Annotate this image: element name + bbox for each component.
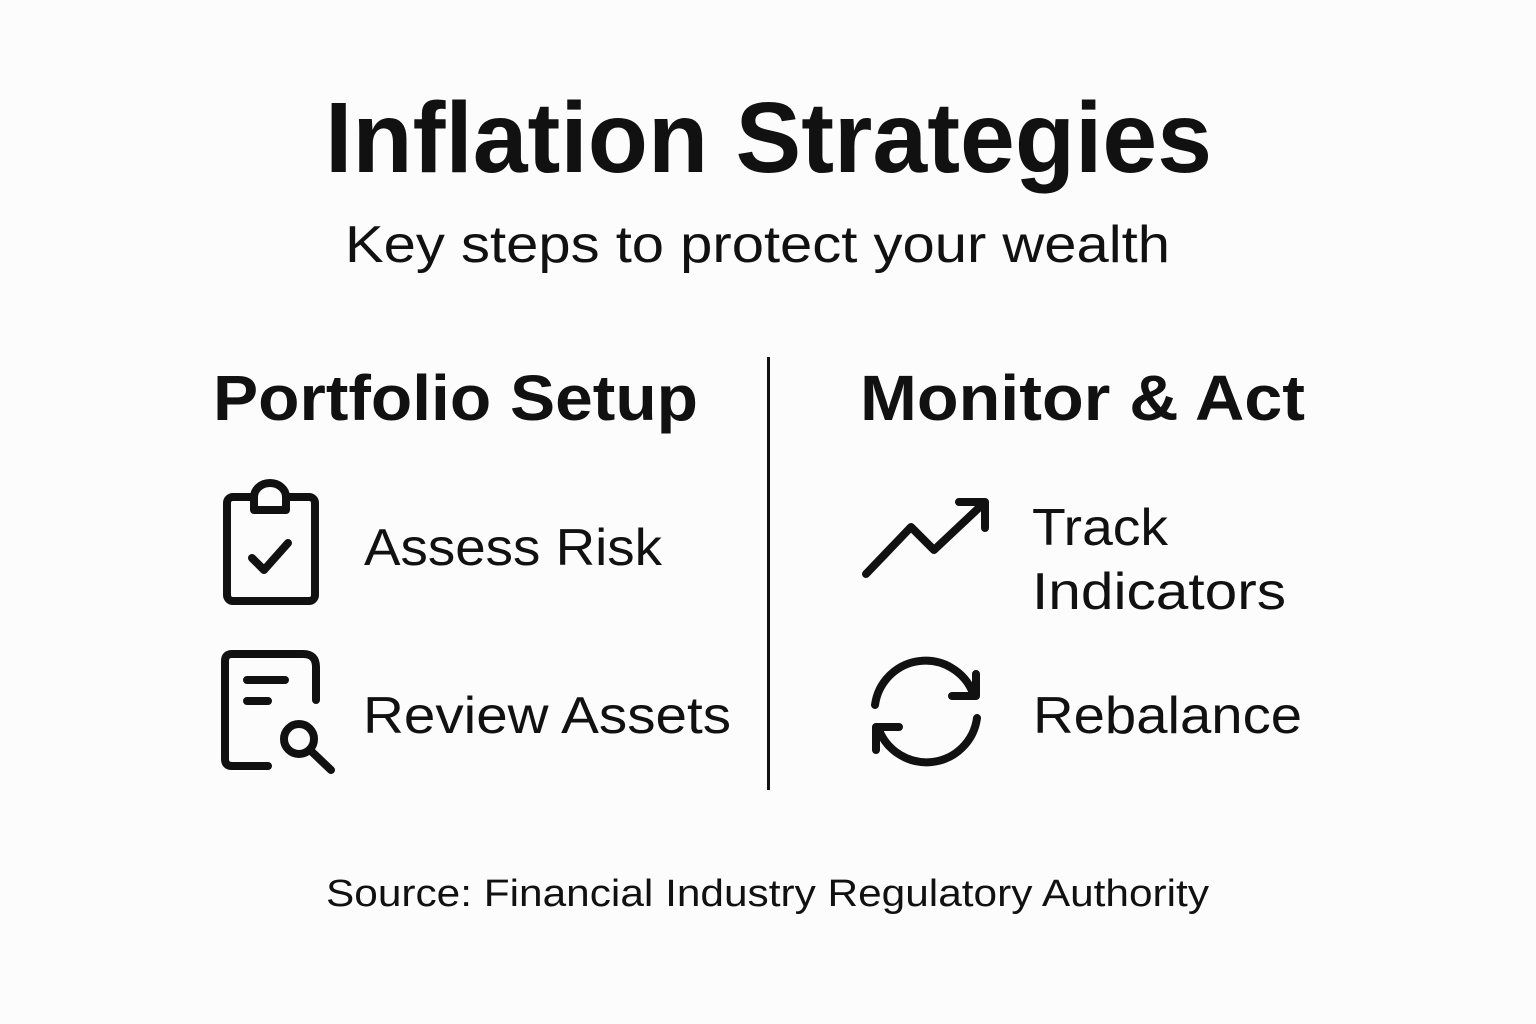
title: Inflation Strategies	[325, 82, 1212, 194]
source note: Source: Financial Industry Regulatory Authority	[326, 873, 1209, 915]
text: Track Indicators: Track	[1032, 499, 1169, 557]
text: Review Assets: Review Assets	[363, 687, 731, 745]
text: Rebalance: Rebalance	[1033, 687, 1302, 745]
icon: trend up	[866, 502, 985, 574]
panel: monitor & act: Indicators	[1032, 563, 1286, 621]
subtitle: Key steps to protect your wealth	[345, 216, 1170, 274]
panel: monitor & act	[860, 362, 1305, 762]
icon: clipboard check	[227, 483, 315, 601]
heading: Monitor & Act: Monitor & Act	[860, 362, 1305, 434]
divider	[767, 357, 770, 790]
panel: portfolio setup	[213, 362, 731, 770]
heading: Portfolio Setup: Portfolio Setup	[213, 362, 698, 434]
icon: document search	[225, 654, 331, 770]
text: Assess Risk: Assess Risk	[364, 519, 663, 577]
icon: refresh	[875, 661, 977, 762]
